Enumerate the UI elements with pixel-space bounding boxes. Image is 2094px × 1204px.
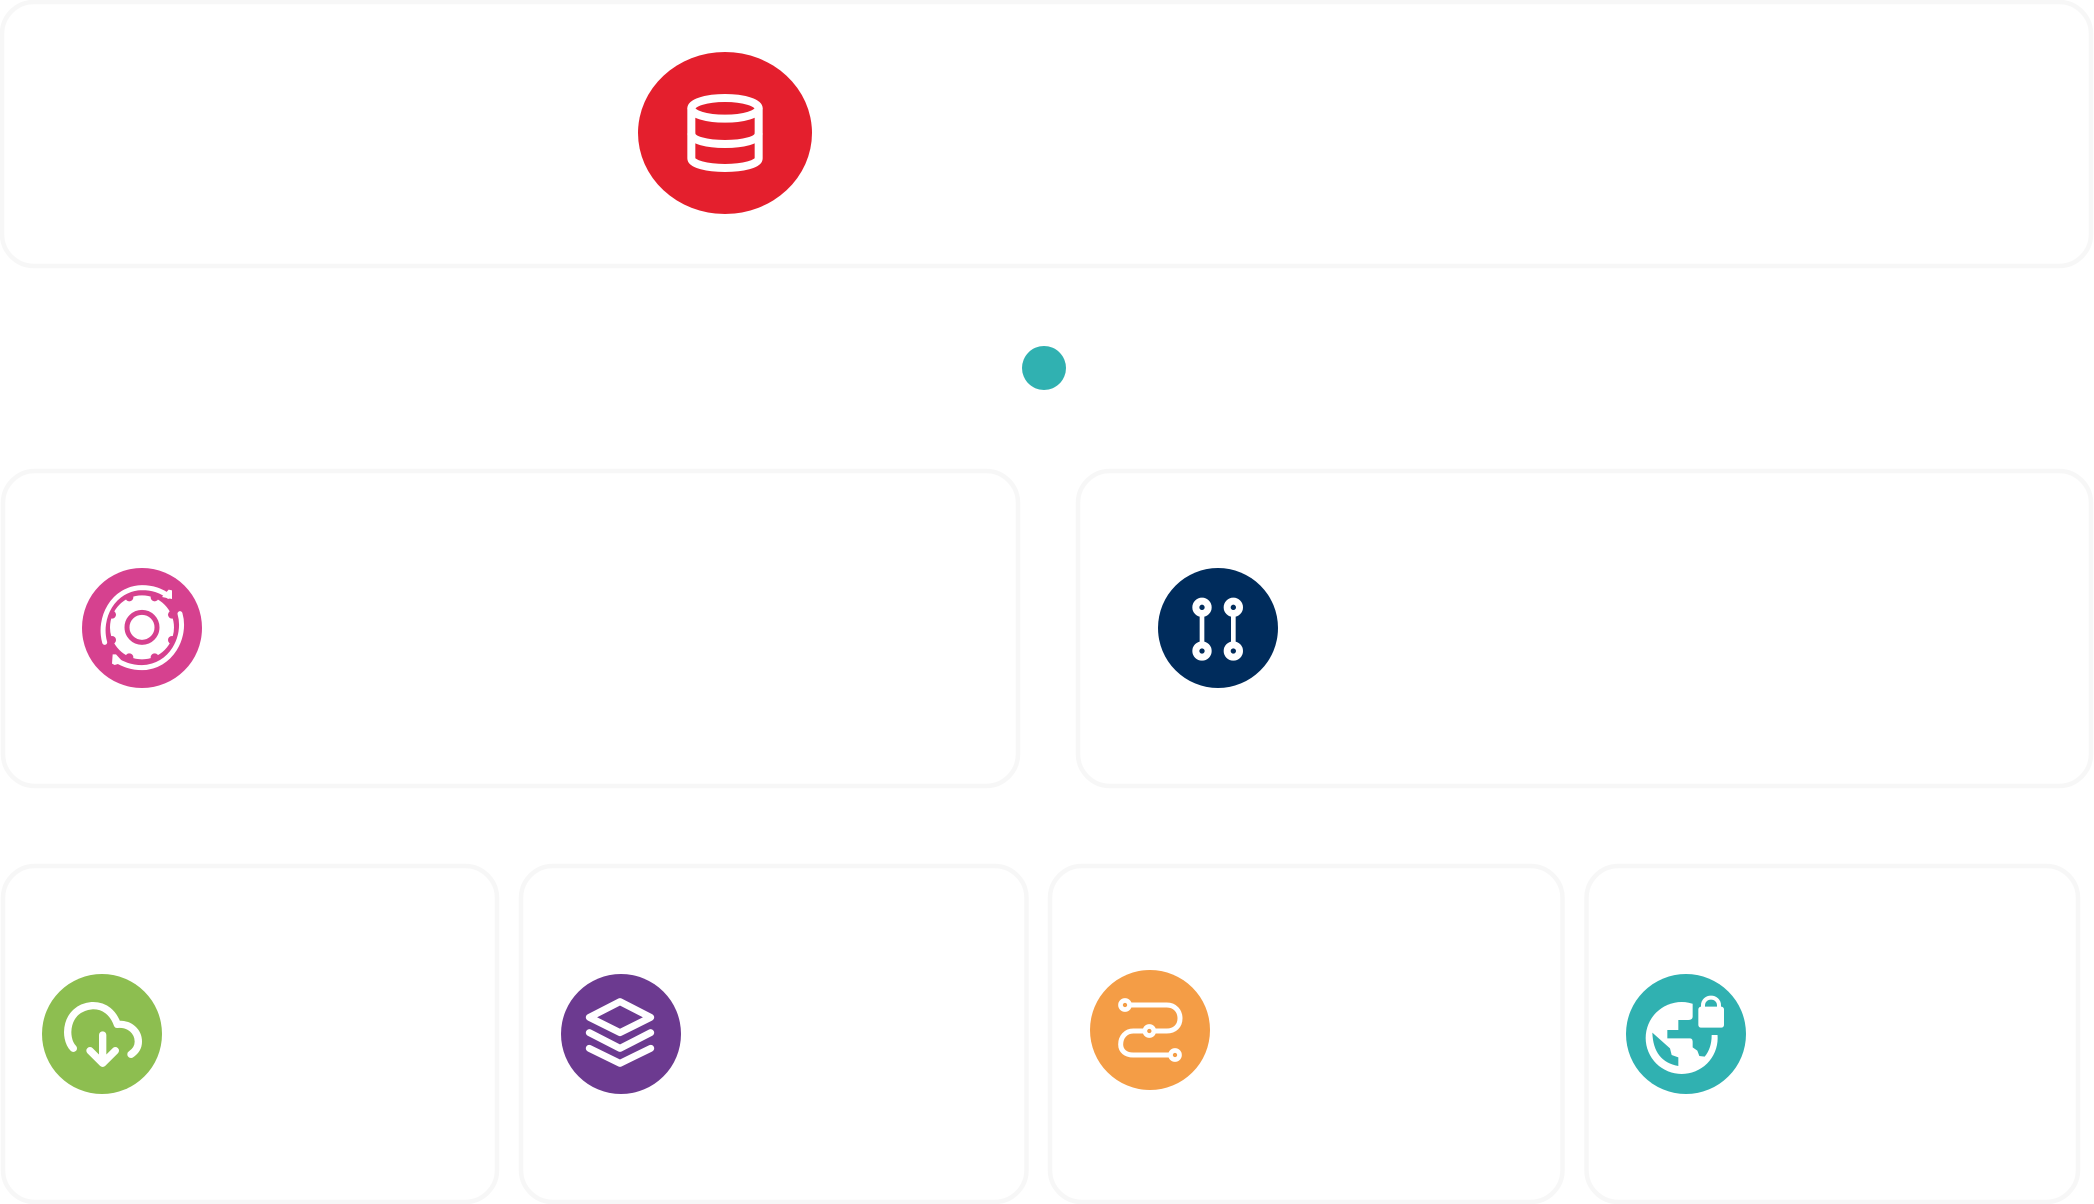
panel: top database panel (2, 2, 2091, 266)
panel: bottom card 1 (3, 866, 497, 1202)
icon: database (638, 52, 812, 214)
icon: route path (1090, 970, 1210, 1090)
icon: teal dot (1022, 346, 1066, 390)
panel: bottom card 2 (521, 866, 1026, 1202)
icon: secure globe (1626, 974, 1746, 1094)
icon: cloud download (42, 974, 162, 1094)
icon: layers (561, 974, 681, 1094)
panel: bottom card 4 (1586, 866, 2078, 1202)
panel: middle right (1078, 471, 2091, 786)
panel: middle left (3, 471, 1018, 786)
icon: gear with rotating arrows (82, 568, 202, 688)
panel: bottom card 3 (1050, 866, 1562, 1202)
icon: two connected links (1158, 568, 1278, 688)
